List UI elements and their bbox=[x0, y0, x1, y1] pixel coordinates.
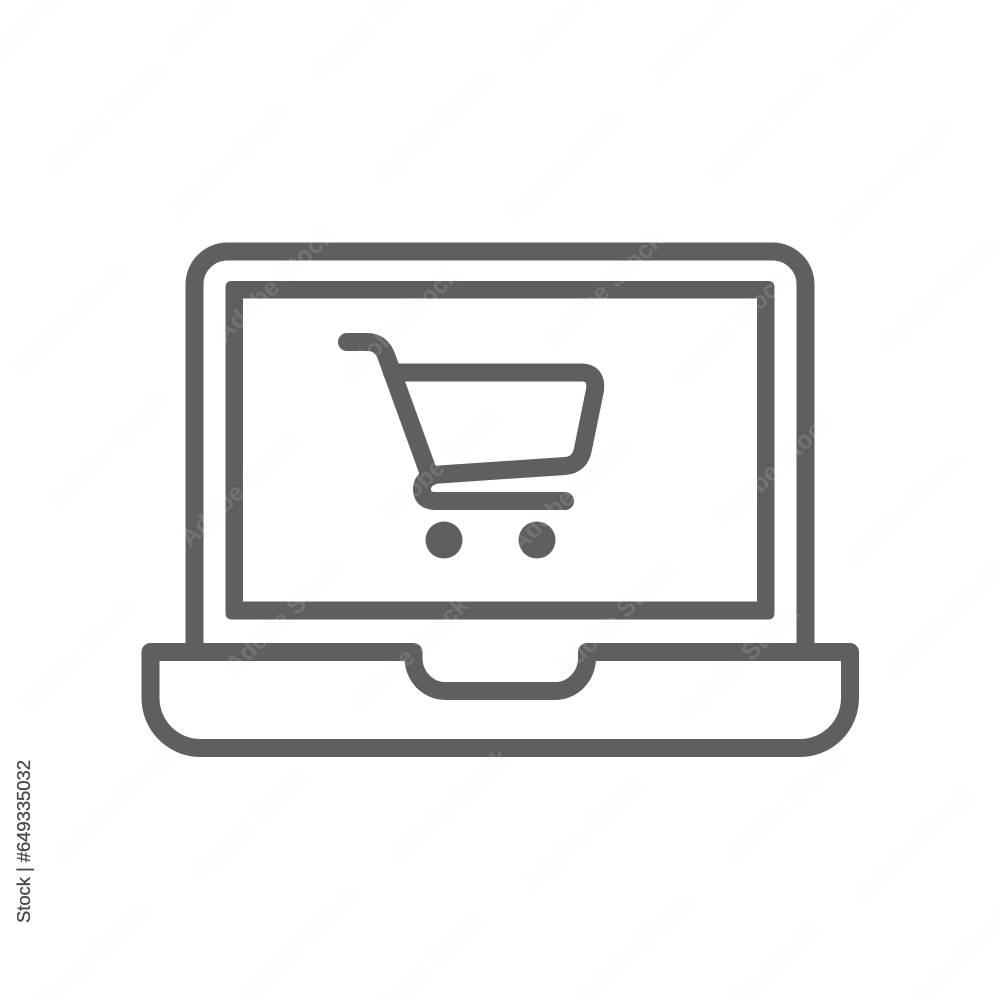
watermark pattern: Adobe Stock bbox=[50, 741, 179, 867]
laptop base bbox=[150, 652, 850, 748]
watermark pattern: Adobe Stock bbox=[345, 591, 474, 717]
cart basket bbox=[392, 372, 595, 475]
laptop lid bbox=[194, 252, 806, 652]
watermark pattern: Adobe Stock bbox=[15, 591, 144, 717]
stock id text: Stock | #649335032 bbox=[13, 760, 34, 923]
watermark pattern: Adobe Stock bbox=[40, 56, 169, 182]
icon: shopping cart bbox=[347, 342, 595, 558]
watermark pattern: Adobe Stock bbox=[210, 221, 339, 347]
icon: laptop bbox=[150, 252, 850, 748]
watermark pattern: Adobe Stock bbox=[375, 401, 504, 527]
watermark pattern: Adobe Stock bbox=[540, 226, 669, 352]
cart handle and frame bbox=[347, 342, 429, 474]
cart wheel right bbox=[518, 522, 556, 558]
watermark pattern: Adobe Stock bbox=[550, 556, 679, 682]
watermark pattern: Adobe Stock bbox=[702, 63, 831, 189]
watermark pattern: Adobe Stock bbox=[505, 431, 634, 557]
laptop screen bbox=[226, 281, 774, 620]
watermark pattern: Adobe Stock bbox=[220, 553, 349, 679]
watermark pattern: Adobe Stock bbox=[850, 781, 979, 907]
cart base rail bbox=[422, 476, 565, 501]
watermark pattern: Adobe Stock bbox=[500, 103, 629, 229]
watermark pattern: Adobe Stock bbox=[45, 386, 174, 512]
watermark pattern: Adobe Stock bbox=[335, 261, 464, 387]
watermark pattern: Adobe Stock bbox=[385, 743, 514, 869]
cart wheel left bbox=[426, 522, 462, 558]
watermark pattern: Adobe Stock bbox=[5, 256, 134, 382]
watermark pattern: Adobe Stock bbox=[675, 599, 804, 725]
watermark pattern: Adobe Stock bbox=[710, 406, 839, 532]
watermark pattern: Adobe Stock bbox=[175, 426, 304, 552]
watermark pattern: Adobe Stock bbox=[830, 113, 959, 239]
watermark pattern: Adobe Stock bbox=[370, 63, 499, 189]
watermark pattern: Adobe Stock bbox=[720, 743, 849, 869]
watermark pattern: Adobe Stock bbox=[185, 761, 314, 887]
watermark pattern: Adobe Stock bbox=[518, 771, 647, 897]
watermark pattern: Adobe Stock bbox=[665, 266, 794, 392]
watermark pattern: Adobe Stock bbox=[840, 446, 969, 572]
watermark pattern: Adobe Stock bbox=[166, 97, 295, 223]
